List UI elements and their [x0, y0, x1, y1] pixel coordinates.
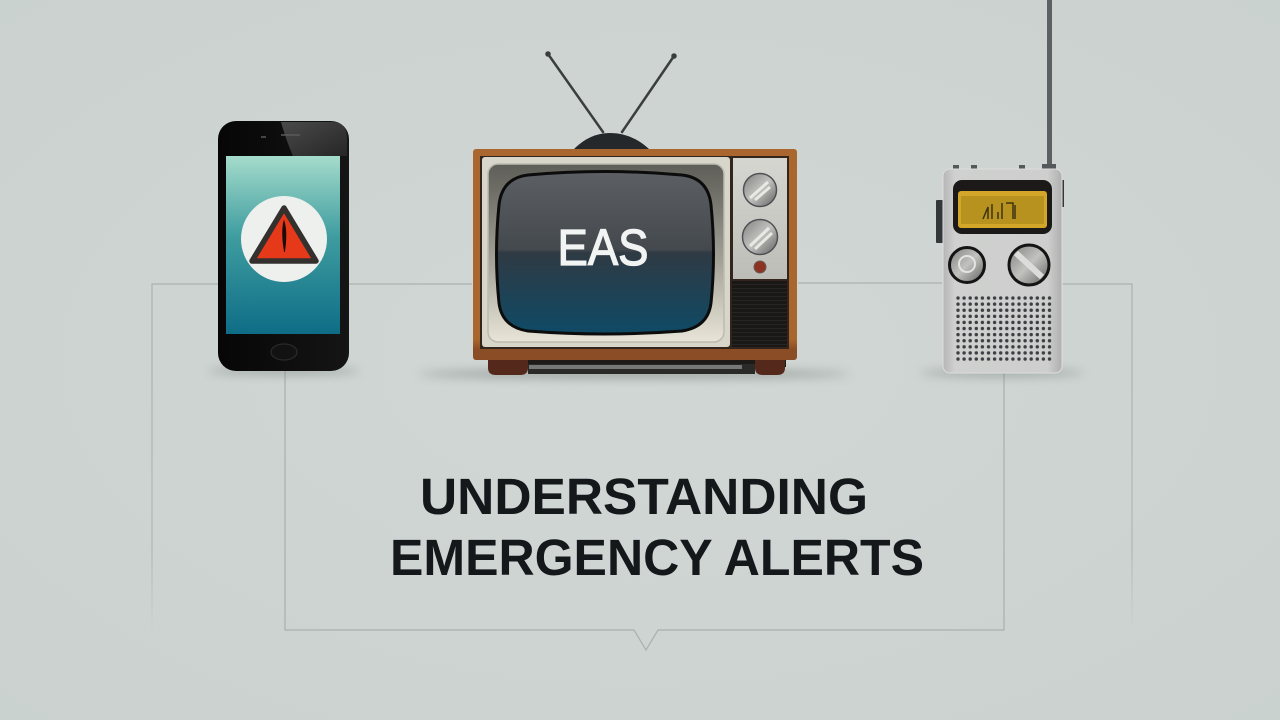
TV underside shadow	[488, 358, 786, 367]
TV bottom bar	[528, 364, 755, 374]
icon: smartphone	[218, 121, 349, 371]
TV bezel	[482, 157, 730, 347]
radio display signal glyph	[983, 203, 1015, 219]
radio top studs	[953, 164, 1056, 170]
phone speaker slot	[261, 135, 300, 137]
radio body	[943, 169, 1062, 373]
TV antennas	[546, 52, 676, 132]
TV knob upper	[744, 174, 776, 206]
radio display	[958, 191, 1047, 228]
title line 2: EMERGENCY ALERTS	[390, 529, 924, 586]
radio antenna	[1047, 0, 1052, 170]
connector lines frame	[152, 283, 1132, 650]
phone top glare	[281, 122, 347, 156]
TV indicator light	[754, 261, 766, 273]
floor shadows	[208, 368, 1084, 378]
TV feet	[488, 360, 785, 375]
TV antenna base	[574, 133, 649, 149]
phone body	[218, 121, 349, 371]
title	[390, 468, 924, 586]
phone home button	[271, 344, 297, 360]
TV knob lower	[742, 220, 778, 254]
radio display housing	[953, 180, 1052, 234]
icon: handheld radio	[936, 0, 1064, 373]
radio left knob	[950, 248, 984, 282]
title line 1: UNDERSTANDING	[420, 468, 868, 525]
warning triangle	[252, 208, 316, 261]
TV dark inner frame	[480, 156, 789, 349]
radio side buttons	[936, 180, 1064, 243]
icon: retro television	[473, 52, 797, 375]
TV control panel	[733, 158, 787, 279]
TV wood cabinet	[473, 149, 797, 360]
TV screen	[496, 172, 714, 334]
TV speaker grille	[732, 281, 787, 347]
radio speaker grille	[955, 295, 1052, 362]
radio right knob	[1009, 245, 1049, 285]
alert circle	[241, 196, 327, 282]
TV label EAS: EAS	[558, 219, 648, 276]
phone screen	[226, 156, 340, 334]
